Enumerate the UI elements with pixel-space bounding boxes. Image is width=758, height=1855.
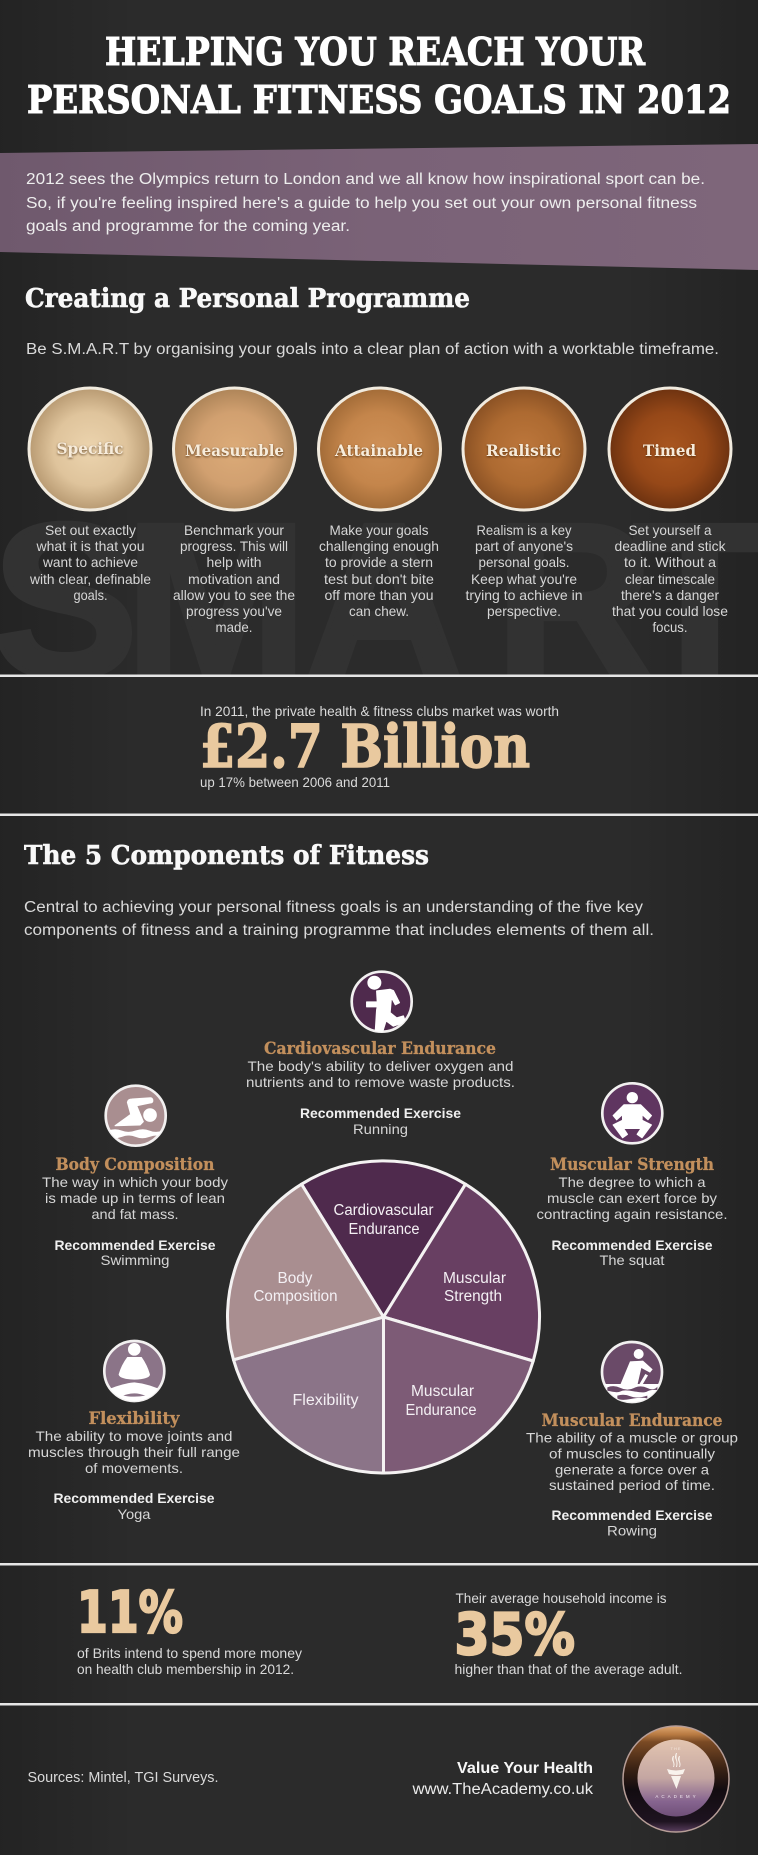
icon: The Academy logo: THE — [670, 1746, 682, 1751]
pie labels: Composition — [254, 1288, 338, 1305]
panel: intro band — [0, 144, 758, 270]
text: Timed description: that you could lose — [612, 603, 728, 619]
slice: muscular strength — [384, 1184, 540, 1361]
text: Timed description: to it. Without a — [624, 554, 716, 570]
component: cardiovascular endurance: Cardiovascular Endurance — [264, 1039, 496, 1058]
circle: Timed — [609, 388, 731, 510]
component: body composition: Body Composition — [56, 1155, 214, 1174]
text: Measurable description: help with — [206, 554, 262, 570]
component: flexibility: Recommended Exercise — [54, 1490, 215, 1506]
slice: flexibility — [234, 1317, 384, 1473]
icon: rowing — [600, 1342, 664, 1405]
text: Specific description: want to achieve — [42, 554, 138, 570]
stat: 35 percent: Their average household income is — [456, 1590, 666, 1606]
stat: 11 percent: of Brits intend to spend more money — [77, 1645, 302, 1661]
component: muscular endurance: of muscles to continually — [549, 1446, 715, 1462]
component: flexibility: Flexibility — [88, 1409, 180, 1428]
text: Specific description: Set out exactly — [45, 522, 136, 538]
icon: squat — [602, 1083, 662, 1143]
text: Realistic description: part of anyone's — [475, 538, 573, 554]
pie labels: Endurance — [406, 1402, 476, 1419]
pie labels: Muscular — [443, 1270, 506, 1287]
stat: 35 percent: higher than that of the average adult. — [454, 1661, 682, 1677]
torch — [667, 1753, 685, 1789]
text: value your health: www.TheAcademy.co.uk — [411, 1781, 593, 1798]
circle: Realistic: Realistic — [486, 441, 561, 460]
text: Attainable description — [319, 522, 439, 619]
stat: 11 percent — [77, 1580, 302, 1677]
text: SMART intro: Be S.M.A.R.T by organising your goals into a clear plan of action with a worktable timeframe. — [26, 341, 719, 358]
component: body composition: Swimming — [100, 1252, 170, 1268]
pie labels: Cardiovascular — [334, 1202, 434, 1219]
text: Attainable description: can chew. — [349, 603, 409, 619]
stat: 35 percent: 35% — [454, 1602, 575, 1668]
text: components intro: components of fitness and a training programme that includes elements of them all. — [24, 922, 654, 939]
title — [27, 29, 731, 122]
stat: market worth: up 17% between 2006 and 2011 — [200, 774, 390, 790]
ghost word SMART: SMART — [0, 479, 758, 723]
component: flexibility: The ability to move joints and — [36, 1428, 232, 1444]
component: muscular strength: contracting again resistance. — [536, 1206, 728, 1222]
text: components intro: Central to achieving your personal fitness goals is an understanding of the five key — [24, 899, 643, 916]
text: Realistic description: personal goals. — [478, 554, 570, 570]
pie labels: Body — [278, 1270, 313, 1287]
text: Timed description: clear timescale — [625, 571, 715, 587]
component: cardiovascular endurance: The body's ability to deliver oxygen and — [248, 1058, 514, 1074]
component: muscular endurance: The ability of a muscle or group — [526, 1430, 738, 1446]
text: Specific description: what it is that you — [36, 538, 145, 554]
circle: Specific — [29, 388, 151, 510]
text: Realistic description: perspective. — [487, 603, 561, 619]
text: Specific description: goals. — [74, 587, 108, 603]
component: body composition: The way in which your body — [42, 1174, 228, 1190]
text: Measurable description — [173, 522, 295, 635]
component: muscular endurance: generate a force over a — [555, 1462, 709, 1478]
pie labels: Endurance — [348, 1221, 420, 1238]
component: muscular endurance — [526, 1411, 738, 1538]
text: Realistic description: Keep what you're — [471, 571, 577, 587]
heading: creating a personal programme: Creating a Personal Programme — [25, 284, 470, 314]
icon: The Academy logo: ACADEMY — [655, 1794, 699, 1799]
component: muscular strength: muscle can exert force by — [547, 1190, 717, 1206]
icon: swimming — [106, 1086, 166, 1146]
text: Realistic description: trying to achieve in — [466, 587, 582, 603]
text: Realistic description — [466, 522, 582, 619]
pie labels — [254, 1202, 506, 1419]
component: body composition — [42, 1155, 228, 1268]
icon: The Academy logo — [623, 1726, 729, 1832]
pie labels: Muscular — [411, 1383, 474, 1400]
text: Measurable description: motivation and — [188, 571, 280, 587]
component: muscular endurance: sustained period of time. — [549, 1477, 715, 1493]
panel: SMART goals — [29, 388, 731, 635]
text: Timed description — [612, 522, 728, 635]
slice: cardiovascular endurance — [302, 1161, 466, 1317]
text: Measurable description: Benchmark your — [184, 522, 284, 538]
stat: 35 percent — [454, 1590, 682, 1677]
text: sources: Sources: Mintel, TGI Surveys. — [28, 1770, 218, 1786]
title: HELPING YOU REACH YOUR — [105, 29, 645, 74]
component: flexibility — [28, 1409, 240, 1522]
text: Timed description: there's a danger — [621, 587, 719, 603]
component: muscular endurance: Recommended Exercise — [552, 1507, 713, 1523]
stat: market worth: £2.7 Billion — [200, 712, 530, 781]
stat: 11 percent: on health club membership in 2012. — [77, 1661, 294, 1677]
heading: the 5 components of fitness: The 5 Components of Fitness — [24, 841, 429, 871]
text: components intro — [24, 899, 654, 939]
text: Measurable description: allow you to see the — [173, 587, 295, 603]
panel: intro band: 2012 sees the Olympics return to London and we all know how inspirational sport can be. — [26, 171, 705, 188]
component: body composition: and fat mass. — [92, 1206, 178, 1222]
text: Specific description — [29, 522, 151, 603]
circle: Attainable: Attainable — [334, 441, 423, 460]
component: flexibility: Yoga — [118, 1506, 151, 1522]
text: value your health — [411, 1760, 593, 1798]
text: Timed description: Set yourself a — [628, 522, 712, 538]
slice: body composition — [227, 1184, 384, 1360]
component: cardiovascular endurance: nutrients and to remove waste products. — [246, 1074, 515, 1090]
component: muscular endurance: Rowing — [607, 1522, 657, 1538]
text: Attainable description: test but don't bite — [324, 571, 434, 587]
component: muscular endurance: Muscular Endurance — [542, 1411, 722, 1430]
component: muscular strength: The degree to which a — [558, 1174, 706, 1190]
text: Attainable description: Make your goals — [330, 522, 428, 538]
text: Measurable description: made. — [216, 619, 252, 635]
component: cardiovascular endurance: Running — [353, 1121, 408, 1137]
stat: market worth: In 2011, the private health & fitness clubs market was worth — [200, 703, 559, 719]
component: flexibility: of movements. — [85, 1460, 183, 1476]
circle: Timed: Timed — [643, 441, 696, 460]
text: Realistic description: Realism is a key — [476, 522, 572, 538]
slice: muscular endurance — [384, 1317, 533, 1473]
text: value your health: Value Your Health — [457, 1760, 593, 1777]
panel: intro band: So, if you're feeling inspired here's a guide to help you set out your own personal fitness — [26, 195, 697, 212]
component: flexibility: muscles through their full range — [28, 1444, 240, 1460]
text: Attainable description: to provide a stern — [325, 554, 433, 570]
text: Attainable description: off more than you — [324, 587, 434, 603]
pie labels: Strength — [444, 1288, 502, 1305]
text: Measurable description: progress you've — [186, 603, 282, 619]
text: Timed description: focus. — [652, 619, 688, 635]
circle: Realistic — [463, 388, 585, 510]
component: body composition: Recommended Exercise — [54, 1237, 216, 1253]
component: muscular strength: The squat — [600, 1252, 665, 1268]
icon: running — [352, 972, 412, 1032]
component: body composition: is made up in terms of lean — [45, 1190, 225, 1206]
icon: yoga — [103, 1341, 165, 1405]
component: muscular strength — [536, 1155, 728, 1268]
panel: intro band: goals and programme for the coming year. — [26, 218, 350, 235]
chart: five components pie — [227, 1161, 540, 1473]
text: Attainable description: challenging enough — [319, 538, 439, 554]
circle: Measurable: Measurable — [185, 441, 284, 460]
component: muscular strength: Muscular Strength — [550, 1155, 714, 1174]
stat: 11 percent: 11% — [77, 1580, 183, 1646]
text: Timed description: deadline and stick — [614, 538, 726, 554]
circle: Measurable — [174, 388, 296, 510]
component: cardiovascular endurance: Recommended Exercise — [300, 1105, 461, 1121]
circle: Attainable — [318, 388, 440, 510]
component: muscular strength: Recommended Exercise — [552, 1237, 713, 1253]
circle: Specific: Specific — [56, 439, 124, 458]
pie labels: Flexibility — [292, 1392, 359, 1409]
text: Measurable description: progress. This will — [180, 538, 288, 554]
text: Specific description: with clear, definable — [29, 571, 151, 587]
component: cardiovascular endurance — [246, 1039, 515, 1137]
